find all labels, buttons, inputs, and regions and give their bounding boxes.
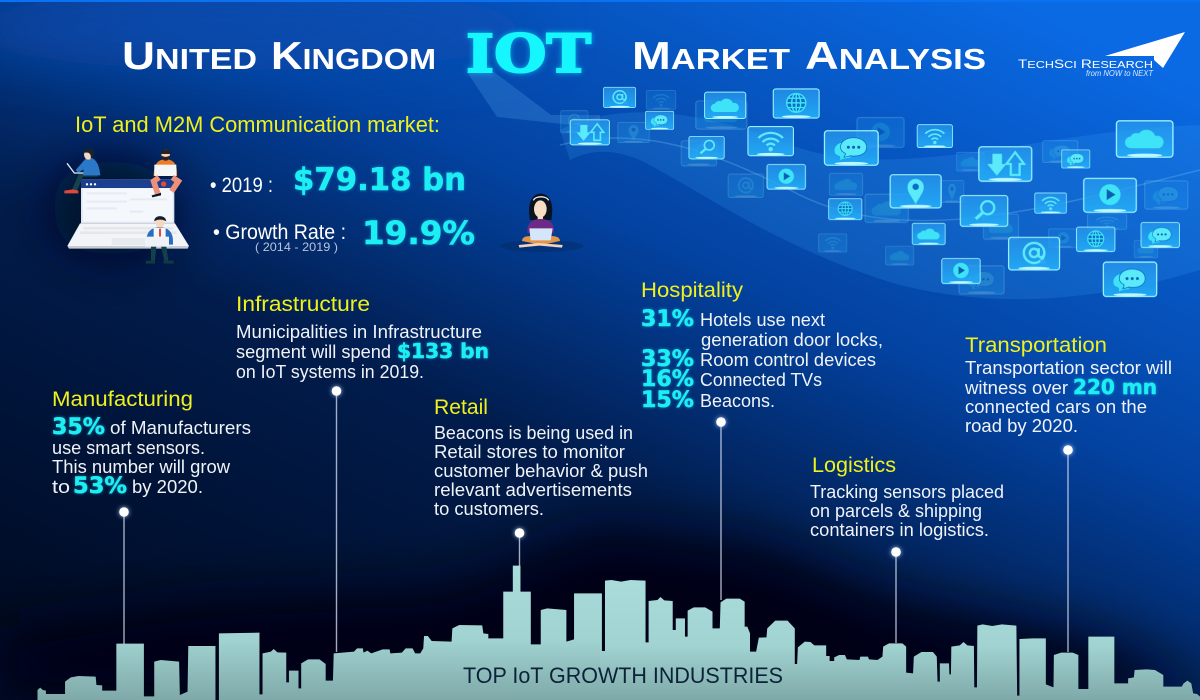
panel: hospitality	[641, 279, 883, 413]
title: IOT: IOT	[466, 24, 591, 85]
stat: growth rate	[213, 214, 475, 254]
panel: infrastructure: on IoT systems in 2019.	[236, 362, 424, 382]
panel: retail: customer behavior & push	[434, 461, 648, 481]
title: Market Analysis: ANALYSIS	[805, 35, 986, 78]
panel: retail	[434, 396, 648, 519]
panel: hospitality: 33%	[641, 347, 694, 372]
title: Market Analysis	[632, 35, 986, 78]
panel: logistics	[810, 454, 1004, 540]
panel: infrastructure: Infrastructure	[236, 293, 370, 316]
panel: hospitality: generation door locks,	[701, 330, 883, 350]
title: United Kingdom: UNITED	[122, 35, 257, 78]
panel: manufacturing: 53%	[73, 474, 127, 499]
panel: manufacturing: 35%	[52, 415, 105, 440]
logo: TechSci Research: TECH SCI R ESEARCH	[1018, 57, 1153, 71]
title: Market Analysis: MARKET	[632, 35, 790, 78]
panel: hospitality: Room control devices	[700, 350, 876, 370]
market heading: IoT and M2M Communication market:	[75, 112, 440, 137]
panel: logistics: on parcels & shipping	[810, 501, 982, 521]
laptop	[67, 179, 189, 249]
illustration: laptop with people	[64, 148, 189, 264]
person in front	[145, 216, 174, 264]
panel: manufacturing: Manufacturing	[52, 388, 193, 411]
panel: manufacturing: by 2020.	[132, 477, 203, 497]
panel: transportation: connected cars on the	[965, 397, 1147, 417]
panel: hospitality: Hospitality	[641, 279, 744, 302]
panel: retail: Retail stores to monitor	[434, 442, 625, 462]
skyline caption: TOP IoT GROWTH INDUSTRIES	[463, 663, 783, 688]
panel: transportation: 220 mn	[1073, 375, 1157, 399]
title	[122, 24, 986, 85]
panel: retail: Beacons is being used in	[434, 423, 633, 443]
panel: infrastructure: $133 bn	[397, 339, 489, 363]
panel: retail: relevant advertisements	[434, 480, 632, 500]
panel: logistics: Tracking sensors placed	[810, 482, 1004, 502]
panel: infrastructure	[236, 293, 489, 382]
industry poles with glowing dots	[119, 386, 1073, 652]
stat: growth rate: 19.9%	[362, 214, 475, 252]
panel: manufacturing: This number will grow	[52, 457, 231, 477]
panel: manufacturing	[52, 388, 251, 499]
title: United Kingdom	[122, 35, 436, 78]
panel: manufacturing: to	[52, 477, 70, 497]
panel: manufacturing: of Manufacturers	[110, 418, 251, 438]
logo: TechSci Research: from NOW to NEXT	[1086, 69, 1154, 78]
panel: manufacturing: use smart sensors.	[52, 438, 205, 458]
panel: logistics: containers in logistics.	[810, 520, 989, 540]
panel: hospitality: 16%	[641, 367, 694, 392]
panel: hospitality: Beacons.	[700, 391, 775, 411]
stat: 2019: • 2019 :	[210, 174, 273, 197]
panel: logistics: Logistics	[812, 454, 896, 477]
icon cloud: IoT app icons	[561, 87, 1188, 297]
panel: retail: to customers.	[434, 499, 544, 519]
stat: 2019: $79.18 bn	[293, 162, 466, 198]
stat: growth rate: • Growth Rate :	[213, 221, 346, 244]
person on left	[64, 148, 100, 193]
panel: hospitality: 31%	[641, 307, 694, 332]
stat: 2019	[210, 162, 466, 198]
panel: transportation: road by 2020.	[965, 416, 1078, 436]
city skyline	[38, 566, 1200, 700]
panel: infrastructure: segment will spend	[236, 342, 391, 362]
panel: transportation	[964, 334, 1172, 436]
panel: retail: Retail	[434, 396, 488, 419]
panel: transportation: Transportation	[965, 334, 1107, 357]
title: United Kingdom: KINGDOM	[271, 35, 436, 78]
stat: growth rate: ( 2014 - 2019 )	[255, 240, 338, 254]
logo: TechSci Research	[1018, 32, 1185, 78]
decorative wave band	[467, 72, 1200, 299]
person on top right	[152, 150, 178, 197]
panel: hospitality: 15%	[641, 388, 694, 413]
panel: hospitality: Connected TVs	[700, 370, 822, 390]
panel: transportation: witness over	[964, 378, 1068, 398]
illustration: woman with laptop	[500, 194, 583, 252]
panel: infrastructure: Municipalities in Infrastructure	[236, 322, 482, 342]
panel: hospitality: Hotels use next	[700, 310, 825, 330]
panel: transportation: Transportation sector will	[965, 358, 1172, 378]
